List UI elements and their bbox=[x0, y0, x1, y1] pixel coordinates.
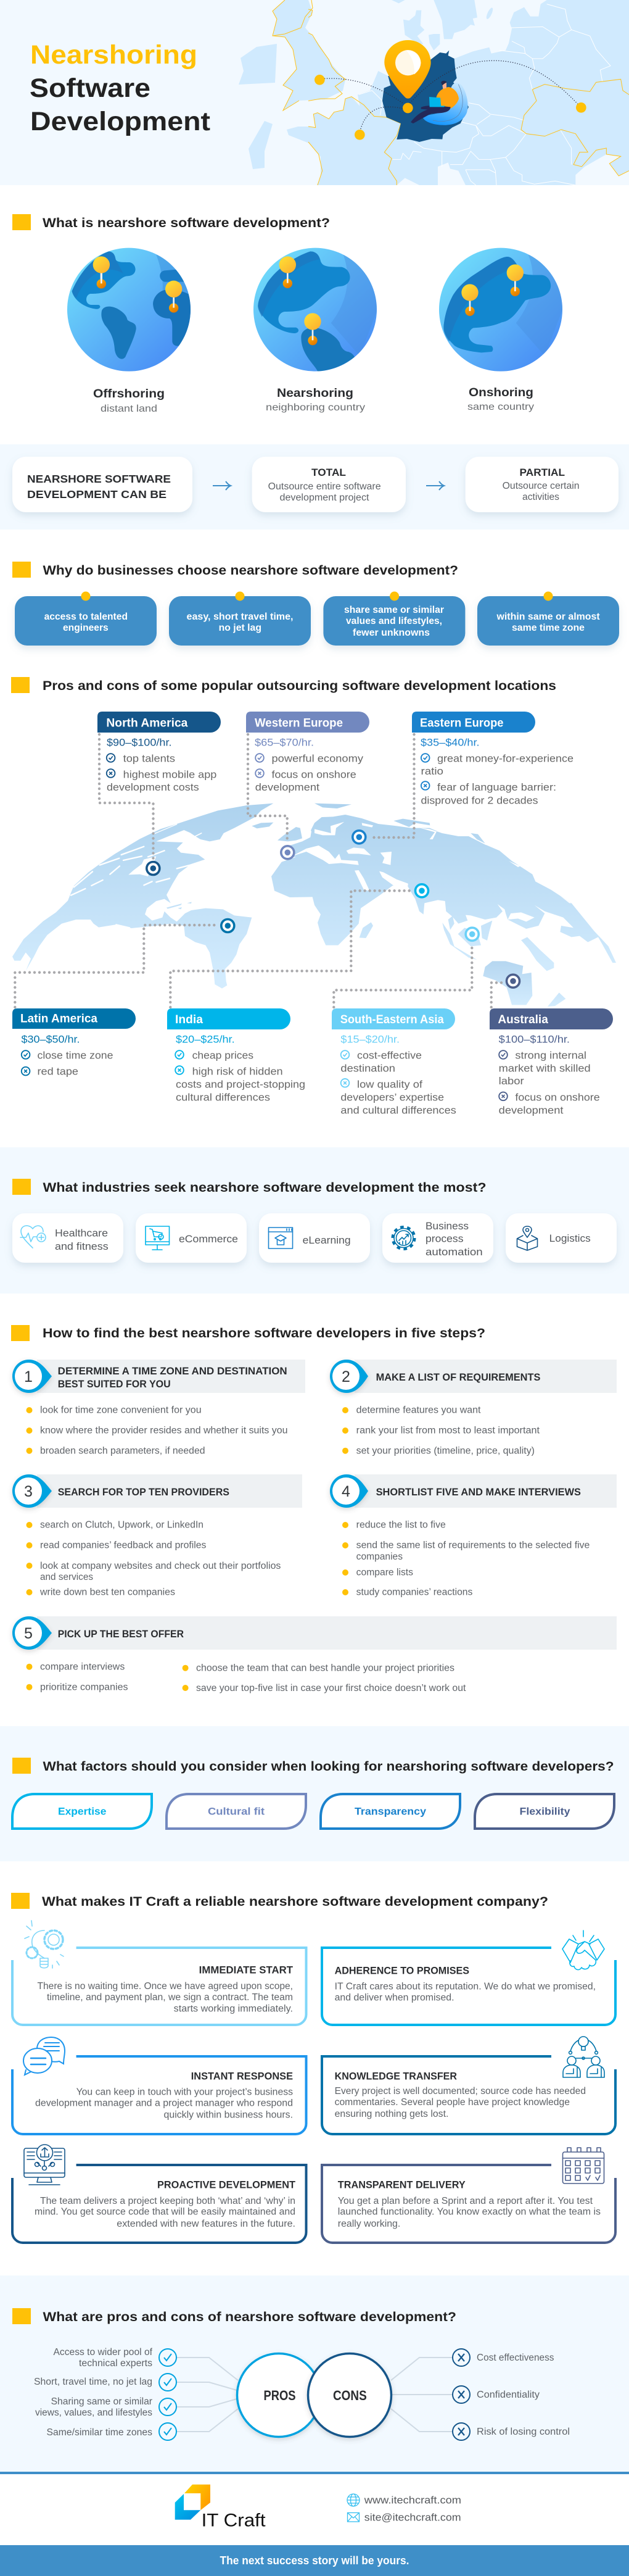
region: western europe: Western Europe bbox=[255, 717, 343, 730]
step 4: compare lists bbox=[356, 1568, 413, 1577]
step 5: compare interviews bbox=[40, 1662, 125, 1672]
reason card: time zone bbox=[477, 591, 619, 646]
step 2: rank your list from most to least important bbox=[356, 1426, 540, 1435]
heading: What industries seek nearshore software development the most? bbox=[43, 1180, 486, 1195]
panel: why it craft bbox=[11, 1893, 615, 2243]
pros list: Short, travel time, no jet lag bbox=[34, 2377, 152, 2387]
region: south-eastern asia: South-Eastern Asia bbox=[340, 1013, 444, 1026]
connector lines bbox=[15, 734, 504, 1007]
panel: why businesses choose bbox=[12, 562, 619, 646]
card: immediate start: timeline, and payment plan, we sign a contract. The team bbox=[47, 1992, 293, 2003]
card: knowledge transfer: Every project is well documented; source code has needed bbox=[335, 2086, 586, 2096]
panel: outsourcing locations bbox=[11, 677, 616, 1116]
card: total: Outsource entire software bbox=[268, 481, 381, 492]
icon: calendar bbox=[562, 2148, 604, 2183]
step 5: choose the team that can best handle your project priorities bbox=[196, 1663, 454, 1674]
card: healthcare: Healthcare bbox=[55, 1228, 108, 1239]
region: india: India bbox=[175, 1013, 203, 1026]
region: eastern europe: fear of language barrier: bbox=[437, 781, 556, 793]
region: eastern europe: great money-for-experience bbox=[437, 753, 574, 765]
step 4: reduce the list to five bbox=[356, 1520, 446, 1531]
card: logistics bbox=[506, 1213, 617, 1263]
region: south-eastern asia: low quality of bbox=[357, 1079, 422, 1091]
step 5: PICK UP THE BEST OFFER bbox=[58, 1629, 184, 1640]
step 4: study companies’ reactions bbox=[356, 1587, 473, 1598]
card: transparent delivery: You get a plan before a Sprint and a report after it. You test bbox=[338, 2196, 593, 2206]
globe labels: Onshoring bbox=[469, 386, 533, 399]
card: immediate start bbox=[12, 1921, 306, 2025]
card: adherence to promises: and deliver when promised. bbox=[335, 1993, 454, 2003]
globe labels: Offrshoring bbox=[93, 388, 165, 401]
card: business process automation bbox=[382, 1213, 493, 1263]
card: elearning: eLearning bbox=[303, 1234, 351, 1246]
region: western europe: focus on onshore bbox=[271, 769, 356, 781]
region: australia: market with skilled bbox=[499, 1063, 591, 1074]
arrow bbox=[426, 481, 444, 490]
card: knowledge transfer: KNOWLEDGE TRANSFER bbox=[335, 2071, 457, 2082]
footer tagline bar: The next success story will be yours. bbox=[220, 2554, 409, 2567]
heading: Pros and cons of some popular outsourcing software development locations bbox=[43, 678, 556, 693]
card: proactive development bbox=[12, 2145, 306, 2243]
email: site@itechcraft.com bbox=[364, 2512, 461, 2524]
step 1: DETERMINE A TIME ZONE AND DESTINATION bbox=[58, 1366, 287, 1377]
pros list: views, values, and lifestyles bbox=[35, 2408, 152, 2418]
step 5: save your top-five list in case your first choice doesn’t work out bbox=[196, 1683, 466, 1693]
region: latin america: $30–$50/hr. bbox=[21, 1033, 80, 1045]
globe: offshoring bbox=[67, 248, 195, 372]
region: south-eastern asia: $15–$20/hr. bbox=[340, 1033, 400, 1045]
region: north america: top talents bbox=[123, 753, 175, 765]
card: knowledge transfer: ensuring nothing gets lost. bbox=[335, 2109, 448, 2119]
card: partial bbox=[466, 457, 619, 512]
logo: IT Craft bbox=[202, 2510, 266, 2530]
step 3: read companies’ feedback and profiles bbox=[40, 1540, 207, 1551]
cons circle: CONS bbox=[333, 2388, 367, 2403]
card: ecommerce: eCommerce bbox=[179, 1233, 238, 1245]
region: south-eastern asia: and cultural differences bbox=[340, 1104, 456, 1116]
reason card: values: fewer unknowns bbox=[353, 628, 430, 638]
website: www.itechcraft.com bbox=[364, 2495, 461, 2506]
map markers bbox=[147, 831, 520, 987]
card: transparent delivery: launched functionality. You know exactly on what the team is bbox=[338, 2207, 601, 2217]
factor: flexibility bbox=[475, 1794, 614, 1829]
hero title: Development bbox=[30, 107, 210, 136]
region: australia bbox=[490, 1008, 613, 1116]
step 4: 4 bbox=[342, 1483, 350, 1500]
logo bbox=[175, 2485, 266, 2530]
card: instant response: You can keep in touch with your project’s business bbox=[76, 2087, 293, 2098]
region: south-eastern asia bbox=[332, 1008, 456, 1116]
reason card: time zone: same time zone bbox=[512, 623, 585, 633]
panel: industries bbox=[0, 1147, 629, 1294]
card: immediate start: IMMEDIATE START bbox=[199, 1965, 293, 1976]
heading: What is nearshore software development? bbox=[43, 215, 330, 230]
footer tagline bar bbox=[0, 2545, 629, 2576]
card: knowledge transfer bbox=[322, 2037, 615, 2134]
panel: hero bbox=[0, 0, 629, 185]
arrow bbox=[213, 481, 231, 490]
pros list: Same/similar time zones bbox=[47, 2427, 152, 2438]
region: latin america bbox=[12, 1008, 136, 1078]
step 3: write down best ten companies bbox=[39, 1587, 175, 1598]
heading: What makes IT Craft a reliable nearshore software development company? bbox=[42, 1894, 548, 1909]
region: latin america: Latin America bbox=[20, 1012, 97, 1026]
factor: flexibility: Flexibility bbox=[519, 1806, 570, 1818]
step 2: MAKE A LIST OF REQUIREMENTS bbox=[376, 1372, 540, 1383]
step 5: 5 bbox=[24, 1625, 33, 1642]
globe: nearshoring bbox=[253, 248, 380, 372]
hero map of Europe bbox=[239, 0, 629, 185]
step 1: look for time zone convenient for you bbox=[40, 1405, 202, 1416]
card: business process automation: Business bbox=[426, 1220, 469, 1232]
card: immediate start: starts working immediately. bbox=[174, 2004, 293, 2014]
reason card: talent: access to talented bbox=[44, 612, 128, 622]
factor: expertise bbox=[12, 1794, 152, 1829]
reason card: talent: engineers bbox=[63, 623, 109, 633]
region: india: high risk of hidden bbox=[192, 1065, 283, 1078]
card: instant response bbox=[12, 2037, 306, 2134]
germany highlighted bbox=[382, 51, 469, 142]
icon: box with pin bbox=[517, 1226, 538, 1250]
card: nearshore software development can be: NEARSHORE SOFTWARE bbox=[27, 473, 171, 485]
panel: five steps bbox=[11, 1325, 617, 1693]
pros list: Sharing same or similar bbox=[51, 2396, 152, 2407]
card: business process automation: automation bbox=[426, 1246, 483, 1258]
reason card: talent bbox=[15, 591, 157, 646]
card: logistics: Logistics bbox=[549, 1232, 591, 1244]
region: western europe: development bbox=[255, 781, 319, 793]
icon: chat bubbles bbox=[23, 2037, 65, 2075]
region: india: $20–$25/hr. bbox=[176, 1033, 235, 1045]
cons list bbox=[453, 2349, 570, 2440]
card: nearshore software development can be bbox=[12, 457, 192, 512]
connection arcs bbox=[325, 60, 578, 128]
card: knowledge transfer: commentaries. Several people have project knowledge bbox=[335, 2097, 570, 2108]
step 5 bbox=[12, 1616, 617, 1693]
icon: gear with chart bbox=[393, 1227, 414, 1249]
card: healthcare bbox=[12, 1213, 123, 1263]
region: eastern europe bbox=[412, 712, 574, 806]
icon: people sharing idea bbox=[563, 2037, 604, 2077]
globe sublabels: neighboring country bbox=[266, 402, 365, 413]
card: transparent delivery: really working. bbox=[338, 2219, 400, 2229]
region: eastern europe: ratio bbox=[421, 765, 443, 777]
cons list: Confidentiality bbox=[477, 2390, 540, 2400]
card: adherence to promises bbox=[322, 1930, 615, 2025]
pins bbox=[93, 256, 182, 313]
region: eastern europe: disproved for 2 decades bbox=[421, 794, 538, 806]
globe sublabels: same country bbox=[467, 402, 534, 412]
card: proactive development: The team delivers a project keeping both ‘what’ and ‘why’ in bbox=[40, 2196, 295, 2206]
hero title bbox=[30, 40, 210, 136]
card: partial: PARTIAL bbox=[519, 467, 565, 478]
pros circle bbox=[237, 2354, 321, 2437]
panel: nearshore can be bbox=[0, 444, 629, 530]
card: instant response: INSTANT RESPONSE bbox=[191, 2071, 293, 2082]
step 1: know where the provider resides and whether it suits you bbox=[40, 1426, 288, 1435]
icon: monitor with upload bbox=[24, 2145, 65, 2185]
card: partial: activities bbox=[522, 492, 559, 502]
factor: cultural fit bbox=[166, 1794, 306, 1829]
factor: cultural fit: Cultural fit bbox=[208, 1806, 265, 1818]
step 3 bbox=[12, 1474, 302, 1598]
step 1: 1 bbox=[24, 1368, 33, 1386]
card: nearshore software development can be: DEVELOPMENT CAN BE bbox=[27, 488, 166, 501]
panel: footer contact bbox=[0, 2472, 629, 2530]
card: adherence to promises: ADHERENCE TO PROMISES bbox=[335, 1965, 469, 1976]
region: south-eastern asia: developers’ expertise bbox=[340, 1092, 444, 1103]
icon: browser with graduation cap bbox=[269, 1228, 292, 1249]
reason card: time zone: within same or almost bbox=[496, 612, 600, 622]
cons list: Cost effectiveness bbox=[477, 2353, 554, 2363]
region: south-eastern asia: cost-effective bbox=[357, 1049, 422, 1062]
step 4 bbox=[330, 1474, 617, 1598]
region: australia: development bbox=[499, 1104, 564, 1116]
factor: expertise: Expertise bbox=[58, 1806, 106, 1818]
globe sublabels: distant land bbox=[101, 404, 157, 414]
cons circle bbox=[308, 2354, 391, 2437]
panel: what is nearshore bbox=[12, 214, 565, 414]
card: total: development project bbox=[280, 492, 369, 503]
icon: bulb and gears bbox=[25, 1921, 64, 1968]
panel: pros and cons bbox=[0, 2275, 629, 2472]
factor: transparency bbox=[321, 1794, 460, 1829]
pros circle: PROS bbox=[264, 2388, 296, 2403]
card: instant response: development manager and a project manager who respond bbox=[35, 2098, 293, 2109]
region: north america: $90–$100/hr. bbox=[107, 737, 171, 749]
card: immediate start: There is no waiting time. Once we have agreed upon scope, bbox=[37, 1981, 293, 1992]
region: western europe: powerful economy bbox=[271, 753, 364, 765]
panel: factors bbox=[0, 1726, 629, 1861]
heading: What factors should you consider when looking for nearshoring software developers? bbox=[43, 1759, 614, 1774]
card: business process automation: process bbox=[426, 1233, 464, 1245]
step 2: set your priorities (timeline, price, quality) bbox=[356, 1446, 535, 1456]
location dots bbox=[314, 75, 586, 140]
card: proactive development: PROACTIVE DEVELOPMENT bbox=[157, 2179, 295, 2190]
region: western europe: $65–$70/hr. bbox=[255, 737, 314, 749]
step 1: broaden search parameters, if needed bbox=[40, 1446, 205, 1456]
card: proactive development: extended with new features in the future. bbox=[117, 2219, 295, 2229]
globes bbox=[67, 248, 565, 372]
icon: monitor with cart bbox=[146, 1226, 169, 1250]
step 3: and services bbox=[40, 1572, 93, 1582]
region: north america: highest mobile app bbox=[123, 769, 216, 781]
globe: onshoring bbox=[439, 248, 565, 372]
card: ecommerce bbox=[136, 1213, 247, 1263]
globe sublabels bbox=[101, 402, 534, 414]
icon: heart bbox=[20, 1226, 46, 1248]
heading: What are pros and cons of nearshore software development? bbox=[43, 2309, 456, 2324]
card: transparent delivery bbox=[322, 2148, 615, 2243]
region: india bbox=[167, 1008, 305, 1103]
region: eastern europe: $35–$40/hr. bbox=[421, 737, 480, 749]
card: adherence to promises: IT Craft cares about its reputation. We do what we promised, bbox=[335, 1982, 596, 1992]
hero title: Software bbox=[30, 73, 150, 103]
pins bbox=[279, 256, 321, 345]
cons list: Risk of losing control bbox=[477, 2427, 570, 2437]
region: latin america: red tape bbox=[37, 1065, 78, 1078]
card: total bbox=[252, 457, 406, 512]
step 4: companies bbox=[356, 1552, 403, 1562]
step 3: look at company websites and check out their portfolios bbox=[40, 1561, 281, 1571]
region: eastern europe: Eastern Europe bbox=[420, 717, 503, 730]
reason card: travel bbox=[169, 591, 311, 646]
region: india: costs and project-stopping bbox=[176, 1079, 305, 1091]
world map bbox=[12, 804, 616, 1007]
heading: How to find the best nearshore software developers in five steps? bbox=[43, 1326, 485, 1340]
heading: Why do businesses choose nearshore software development? bbox=[43, 563, 458, 578]
region: australia: strong internal bbox=[515, 1049, 586, 1062]
reason card: values: values and lifestyles, bbox=[346, 616, 442, 626]
globe labels: Nearshoring bbox=[277, 387, 353, 400]
reason card: travel: no jet lag bbox=[219, 623, 261, 633]
hero title: Nearshoring bbox=[30, 40, 197, 70]
pros list: Access to wider pool of bbox=[53, 2347, 153, 2358]
connector lines bbox=[177, 2358, 452, 2432]
reason card: travel: easy, short travel time, bbox=[186, 612, 294, 622]
factor: transparency: Transparency bbox=[355, 1806, 427, 1818]
card: partial: Outsource certain bbox=[503, 481, 580, 491]
region: western europe bbox=[246, 712, 369, 793]
reason card: values: share same or similar bbox=[344, 605, 444, 615]
region: australia: $100–$110/hr. bbox=[499, 1033, 570, 1045]
step 3: SEARCH FOR TOP TEN PROVIDERS bbox=[58, 1487, 229, 1498]
region: india: cheap prices bbox=[192, 1049, 253, 1062]
card: instant response: quickly within business hours. bbox=[164, 2109, 293, 2120]
map pin bbox=[384, 40, 431, 113]
card: total: TOTAL bbox=[311, 467, 346, 478]
step 5: prioritize companies bbox=[40, 1682, 128, 1693]
pros list bbox=[34, 2347, 176, 2440]
step 4: SHORTLIST FIVE AND MAKE INTERVIEWS bbox=[376, 1487, 581, 1498]
region: australia: labor bbox=[499, 1075, 524, 1087]
pros list: technical experts bbox=[79, 2358, 152, 2369]
card: elearning bbox=[259, 1213, 370, 1263]
step 2: 2 bbox=[342, 1368, 350, 1386]
step 2: determine features you want bbox=[356, 1405, 481, 1416]
region: australia: focus on onshore bbox=[515, 1091, 600, 1103]
card: transparent delivery: TRANSPARENT DELIVERY bbox=[338, 2179, 466, 2190]
card: healthcare: and fitness bbox=[55, 1240, 109, 1252]
step 2 bbox=[330, 1360, 617, 1456]
region: north america: development costs bbox=[107, 781, 199, 793]
region: north america: North America bbox=[106, 717, 188, 730]
step 3: search on Clutch, Upwork, or LinkedIn bbox=[40, 1520, 204, 1531]
region: north america bbox=[97, 712, 221, 793]
pins bbox=[461, 264, 524, 316]
icon: handshake bbox=[562, 1930, 604, 1970]
region: india: cultural differences bbox=[176, 1092, 270, 1103]
step 1 bbox=[12, 1360, 305, 1456]
card: proactive development: mind. You get source code that will be easily maintained and bbox=[35, 2207, 295, 2217]
step 3: 3 bbox=[24, 1483, 33, 1500]
reason card: values bbox=[323, 591, 465, 646]
step 1: BEST SUITED FOR YOU bbox=[58, 1379, 171, 1390]
person on bean bag with laptop bbox=[411, 81, 468, 125]
globe labels bbox=[93, 386, 533, 401]
region: south-eastern asia: destination bbox=[340, 1063, 395, 1074]
step 4: send the same list of requirements to the selected five bbox=[356, 1540, 590, 1551]
region: australia: Australia bbox=[498, 1013, 548, 1026]
region: latin america: close time zone bbox=[37, 1049, 113, 1062]
